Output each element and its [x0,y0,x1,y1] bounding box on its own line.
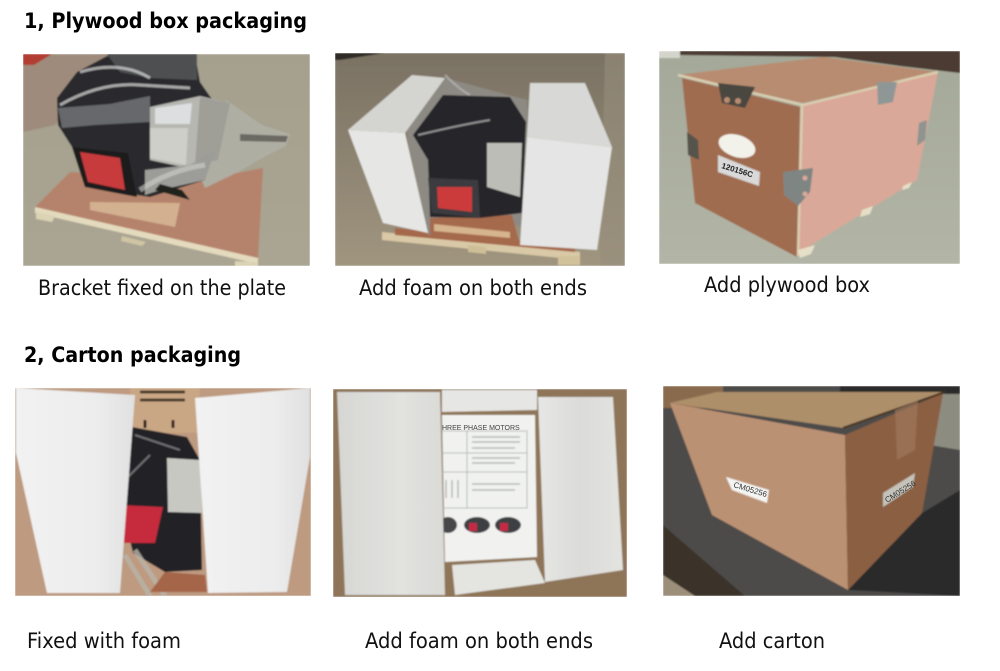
terminal box and red cover [72,147,137,197]
carton side [845,393,943,590]
caption: add foam on both ends: Add foam on both ends [365,629,593,653]
plywood bracket [430,214,519,241]
plastic wrap over gap [405,78,527,235]
photo: foam and manual in carton [333,389,627,597]
box right face [798,72,938,253]
box top [678,57,938,103]
manual title: HREE PHASE MOTORS [442,425,520,432]
caption: add foam on both ends: Add foam on both ends [359,276,587,300]
product thumbnails [439,517,457,533]
left foam [337,392,445,595]
carton seam [843,392,945,428]
photo: fixed with foam [15,388,311,596]
photo: add plywood box [659,51,960,264]
plastic wrap highlights [60,67,190,105]
caption: add carton: Add carton [719,629,825,653]
carton top [670,392,945,428]
label text: CM05256 [732,480,769,499]
heading: carton packaging: 2, Carton packaging [24,343,241,367]
box label [718,155,760,186]
pallet [382,232,580,260]
right foam [195,388,310,593]
left foam [16,388,135,593]
carton labels [726,477,769,503]
plastic cone [195,100,290,188]
photo: add carton: CM05256 [883,478,918,505]
left foam block [348,75,445,133]
box left face [682,78,800,257]
motor body [57,54,216,197]
caption: bracket fixed on the plate: Bracket fixed on the plate [38,276,286,300]
hinges [718,83,755,108]
label text: 120156C [720,161,754,179]
right foam [538,397,623,582]
bottom foam [452,560,545,595]
motor [413,95,526,218]
box edges [678,72,938,105]
photo: bracket fixed on the plate [23,54,310,266]
bracket [90,202,180,227]
right foam block [527,83,612,147]
photo: add foam on both ends [335,53,625,266]
caption: add plywood box: Add plywood box [704,273,870,297]
plywood plate [35,168,263,260]
manual sheet [442,415,537,562]
top foam [442,390,537,412]
photo: add carton [663,386,960,596]
hand hole [718,132,756,160]
carton front [670,403,848,590]
caption: fixed with foam: Fixed with foam [27,629,181,653]
motor [118,427,202,572]
heading: plywood box packaging: 1, Plywood box packaging [24,9,307,33]
